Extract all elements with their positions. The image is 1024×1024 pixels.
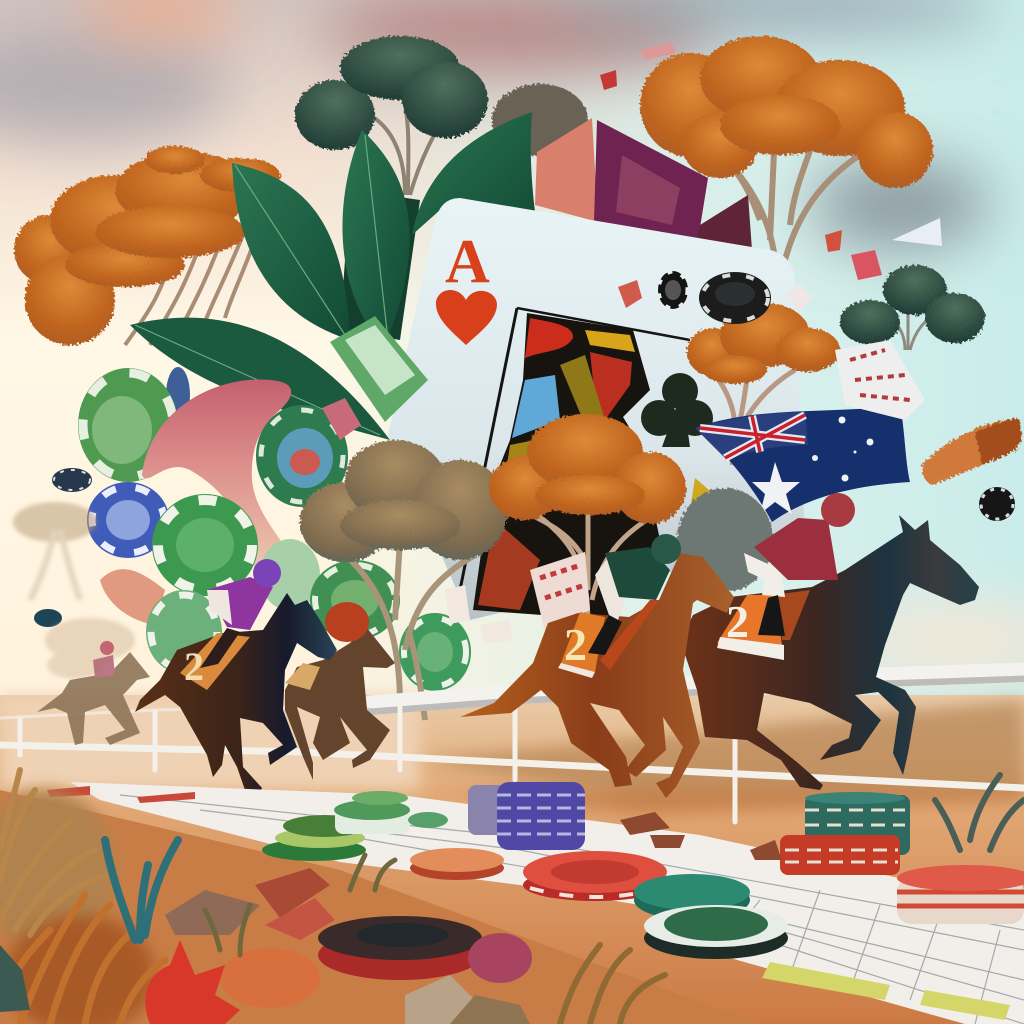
horse: brown left (285, 602, 395, 780)
background sky (0, 0, 1024, 760)
chip: orange (410, 848, 504, 880)
flying cards and small objects (600, 42, 1022, 485)
stack: red dark right (780, 792, 910, 875)
saddle number: 2 (726, 596, 749, 647)
tree: top dark green (295, 36, 588, 195)
stack: red right edge (897, 865, 1024, 924)
chip: blue-black far left (52, 468, 92, 492)
tree: grey-teal centre (677, 488, 773, 592)
chip: black small (658, 271, 688, 309)
racing horses (37, 493, 979, 798)
jockey red (325, 602, 369, 642)
horse: dark left (135, 559, 337, 792)
stack: purple (468, 782, 585, 850)
foreground rocks and plants (0, 770, 1024, 1024)
ace letter: A (445, 228, 490, 296)
light green chips (260, 539, 400, 640)
teal chip with picture (256, 405, 348, 507)
heart symbol (436, 290, 497, 345)
jockey green (588, 534, 681, 655)
right green chip (399, 613, 471, 691)
tree: olive centre (300, 440, 508, 720)
card deck box (535, 118, 752, 250)
tree: left orange (14, 146, 280, 345)
stack: green white (334, 791, 448, 834)
tree: small dark right (840, 265, 985, 350)
tree: orange centre (489, 414, 686, 625)
horse: big dark right (680, 493, 979, 790)
chip: black large (699, 272, 771, 324)
large leaves (130, 112, 535, 440)
small flying cards near horses (445, 552, 590, 644)
queen artwork (460, 308, 770, 620)
tree: small orange over card (687, 303, 840, 465)
betting sheet (47, 782, 1024, 1024)
green chip top (78, 367, 190, 482)
chips in the air (34, 271, 1015, 627)
tree: top right orange (640, 36, 933, 260)
jockey maroon (744, 493, 855, 636)
chip stacks on track (262, 782, 1024, 980)
chip: green pair (634, 874, 788, 959)
chip: red large (523, 851, 667, 901)
australian flag (695, 405, 910, 522)
faded far left trees (13, 502, 135, 679)
saddle number: 2 (564, 619, 587, 670)
horse: chestnut centre (460, 534, 734, 798)
chip: black right (979, 487, 1015, 521)
green chip center (152, 494, 258, 596)
horse: far left small (37, 641, 150, 745)
blue chip (87, 482, 169, 558)
chip: black red foreground (318, 916, 482, 980)
ground (0, 695, 1024, 1024)
saddle number: 2 (184, 644, 204, 689)
stack: green flat (262, 815, 367, 861)
white rail fence (0, 669, 1024, 822)
club symbol (641, 373, 713, 447)
mushroom (100, 380, 291, 625)
giant playing card (388, 198, 805, 620)
green cube die (330, 316, 428, 422)
green chip lower (146, 590, 222, 674)
poker chips cluster left (78, 316, 471, 691)
jockey purple (200, 559, 281, 668)
